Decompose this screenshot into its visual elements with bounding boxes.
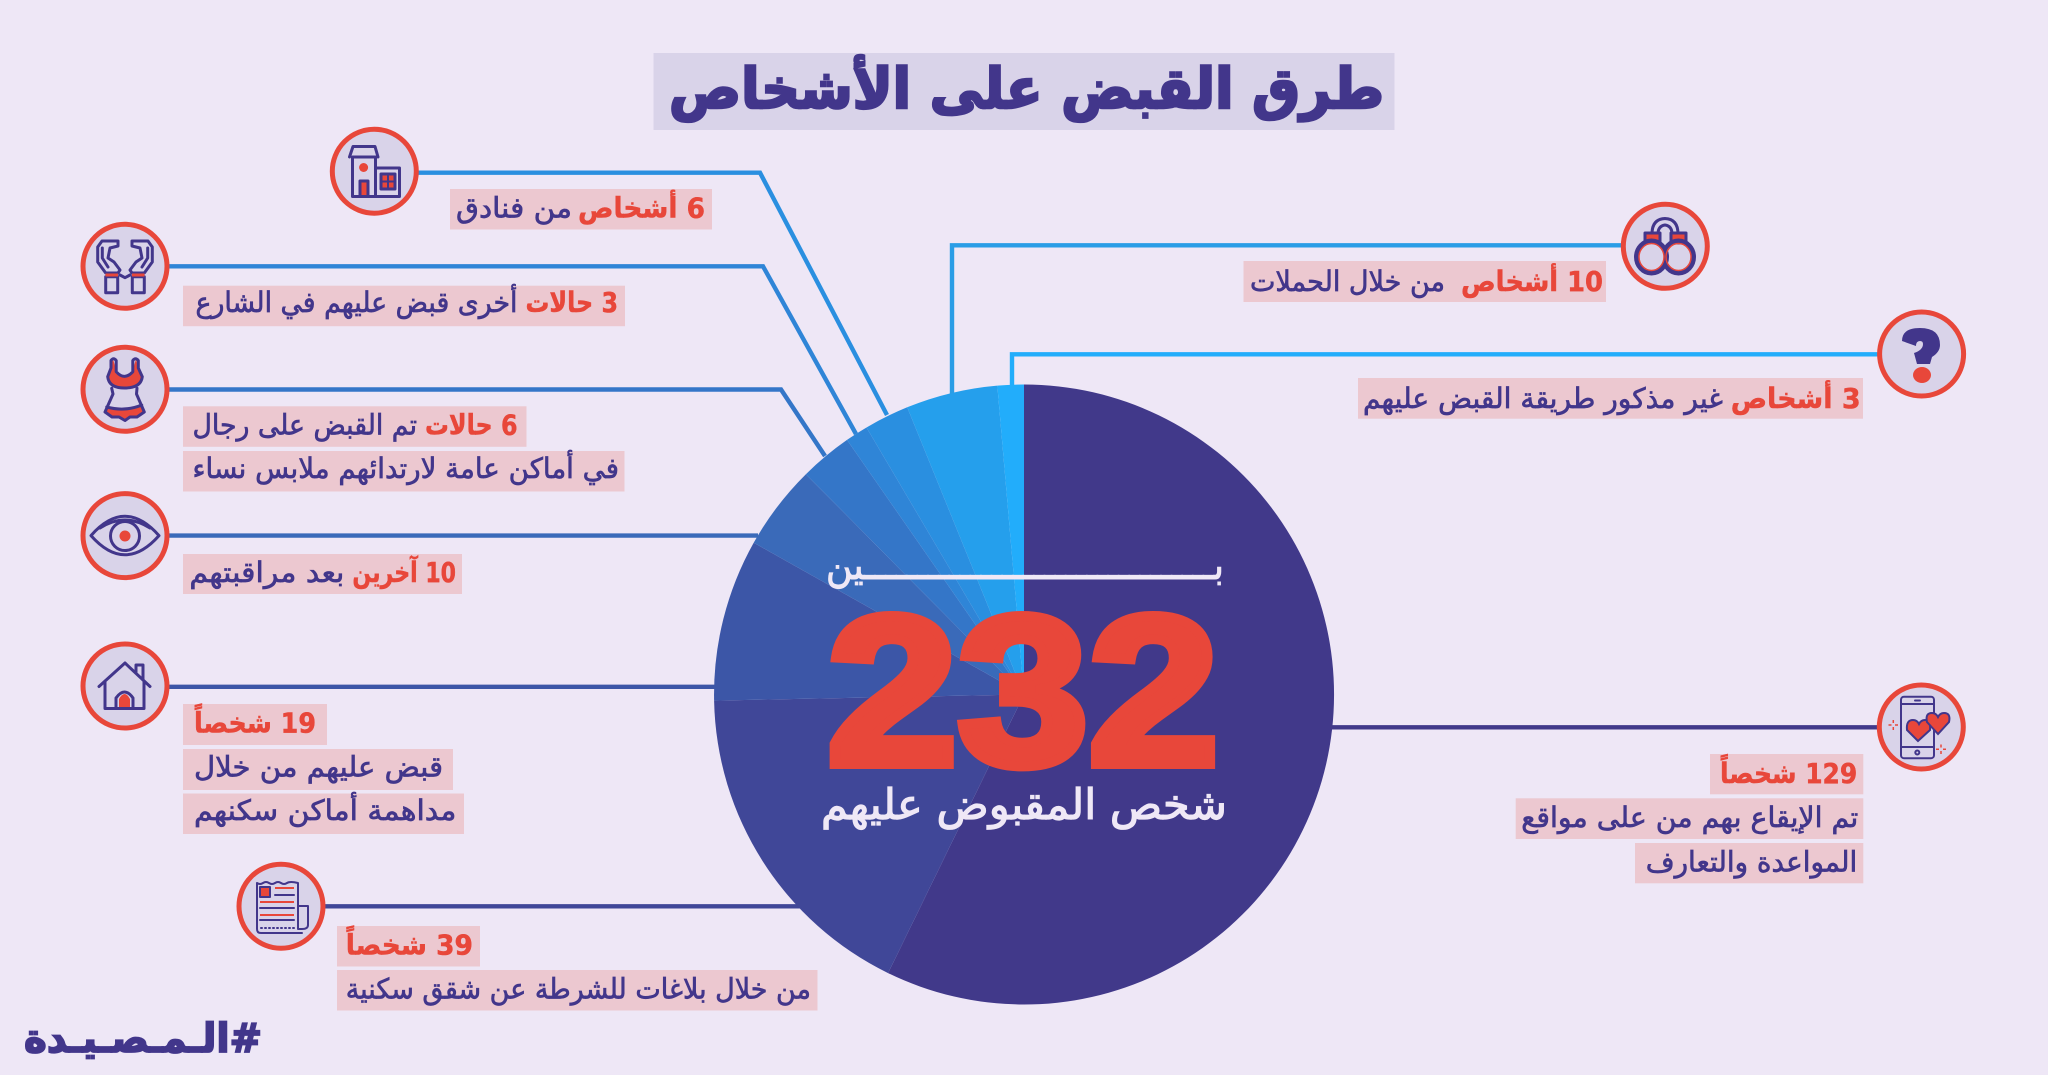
label: 10 people via campaigns: من خلال الحملات [1250,265,1445,298]
center text: between 232 arrested people: 232 [827,572,1219,809]
label: 10 others after surveillance [183,554,462,594]
panel: surveillance [83,494,462,594]
icon: hotel [332,129,416,213]
label: 6 people from hotels [450,189,712,230]
label: 10 people via campaigns [1244,261,1606,302]
panel: hotels [332,129,712,230]
label: 3 people method not mentioned: غير مذكور طريقة القبض عليهم [1363,382,1723,415]
panel: unknown method [1358,312,1964,419]
label: 10 people via campaigns: 10 أشخاص [1461,263,1603,298]
label: 3 cases in the street: 3 حالات [526,286,618,319]
panel: home raids [83,644,464,834]
label: 6 cases men in women's clothes [183,406,624,492]
label: 19 people home raids: 19 شخصاً [194,702,316,740]
icon: cuffed hands [83,224,167,308]
label: 10 others after surveillance: 10 آخرين [352,555,456,589]
panel: police reports [239,864,818,1010]
icon: newspaper report [239,864,323,948]
center text: between 232 arrested people: شخص المقبوض عليهم [821,780,1227,830]
label: 19 people home raids: مداهمة أماكن سكنهم [194,791,456,827]
label: 19 people home raids: قبض عليهم من خلال [194,750,443,784]
label: 39 people from police reports [337,924,818,1010]
label: 3 cases in the street: أخرى قبض عليهم في الشارع [196,283,518,319]
label: 129 people via dating sites: 129 شخصاً [1720,753,1857,790]
center text: between 232 arrested people: بـــــــــــــــــــــــــــــــــين [826,543,1224,589]
panel: campaigns [1244,204,1707,302]
label: 6 cases men in women's clothes: تم القبض على رجال [192,408,417,442]
pie chart: 232 arrests by method [714,384,1334,1005]
label: 3 cases in the street [183,283,625,326]
icon: eye [83,494,167,578]
label: 19 people home raids [183,702,464,834]
panel: dating apps [1516,685,1963,883]
icon: question mark [1880,312,1964,396]
panel: street [83,224,625,326]
icon: handcuffs [1623,204,1707,288]
label: 39 people from police reports: 39 شخصاً [346,924,473,962]
label: 6 people from hotels: 6 أشخاص [578,190,705,224]
label: 6 people from hotels: من فنادق [456,192,572,224]
label: 6 cases men in women's clothes: 6 حالات [425,408,518,442]
connector lines [167,173,1880,906]
title: طرق القبض على الأشخاص [669,54,1384,122]
panel: women's clothes [83,347,624,492]
logo hashtag: #الـمـصـيـدة [24,1016,262,1062]
icon: phone with hearts [1879,685,1963,769]
label: 6 cases men in women's clothes: في أماكن عامة لارتدائهم ملابس نساء [192,449,619,485]
label: 3 people method not mentioned [1358,378,1863,419]
label: 10 others after surveillance: بعد مراقبتهم [189,556,344,589]
label: 129 people via dating sites: تم الإيقاع بهم من على مواقع [1521,801,1858,834]
label: 3 people method not mentioned: 3 أشخاص [1731,380,1861,415]
icon: house [83,644,167,728]
label: 129 people via dating sites: المواعدة والتعارف [1646,846,1857,878]
label: 129 people via dating sites [1516,753,1863,883]
icon: dress [83,347,167,431]
label: 39 people from police reports: من خلال بلاغات للشرطة عن شقق سكنية [346,972,811,1006]
